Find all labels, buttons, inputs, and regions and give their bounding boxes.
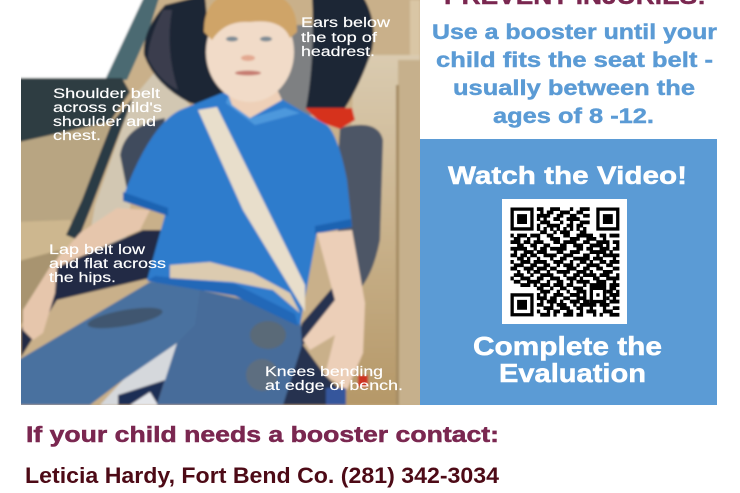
text: complete the evaluation: Complete the xyxy=(473,331,662,361)
QR code xyxy=(502,199,627,324)
panel: watch the video xyxy=(420,139,717,405)
label: shoulder belt: Shoulder belt xyxy=(53,86,160,101)
headrest xyxy=(144,0,225,105)
label: knees xyxy=(265,364,403,393)
label: knees: at edge of bench. xyxy=(265,378,403,393)
label: shoulder belt: across child's xyxy=(53,100,162,115)
label: lap belt: the hips. xyxy=(49,270,116,285)
shirt xyxy=(123,93,352,325)
text: complete the evaluation: Evaluation xyxy=(499,358,646,388)
photo: child seated in a booster seat xyxy=(15,0,425,410)
cushion xyxy=(100,343,177,405)
label: knees: Knees bending xyxy=(265,364,383,379)
heading: watch the video: Watch the Video! xyxy=(448,162,687,190)
booster advice text: ages of 8 -12. xyxy=(493,104,654,128)
label: ears xyxy=(301,15,390,59)
arms and hands xyxy=(23,208,150,340)
seat back wings xyxy=(335,125,383,300)
belts xyxy=(198,107,305,312)
label: shoulder belt: shoulder and xyxy=(53,114,156,129)
label: lap belt xyxy=(49,242,166,285)
booster advice text: child fits the seat belt - xyxy=(436,48,713,72)
booster advice text xyxy=(432,20,718,128)
contact details: Leticia Hardy, Fort Bend Co. (281) 342-3034 xyxy=(25,463,500,488)
neck and face xyxy=(228,90,284,120)
label: lap belt: and flat across xyxy=(49,256,166,271)
jeans xyxy=(15,282,205,405)
label: shoulder belt: chest. xyxy=(53,128,101,143)
label: ears: Ears below xyxy=(301,15,390,30)
label: ears: the top of xyxy=(301,30,377,45)
dark booster base xyxy=(21,230,172,357)
label: lap belt: Lap belt low xyxy=(49,242,145,257)
contact heading: If your child needs a booster contact: xyxy=(26,422,499,447)
booster advice text: usually between the xyxy=(453,76,695,100)
label: ears: headrest. xyxy=(301,44,375,59)
text: complete the evaluation xyxy=(473,331,662,388)
booster advice text: Use a booster until your xyxy=(432,20,718,44)
label: shoulder belt xyxy=(53,86,162,143)
